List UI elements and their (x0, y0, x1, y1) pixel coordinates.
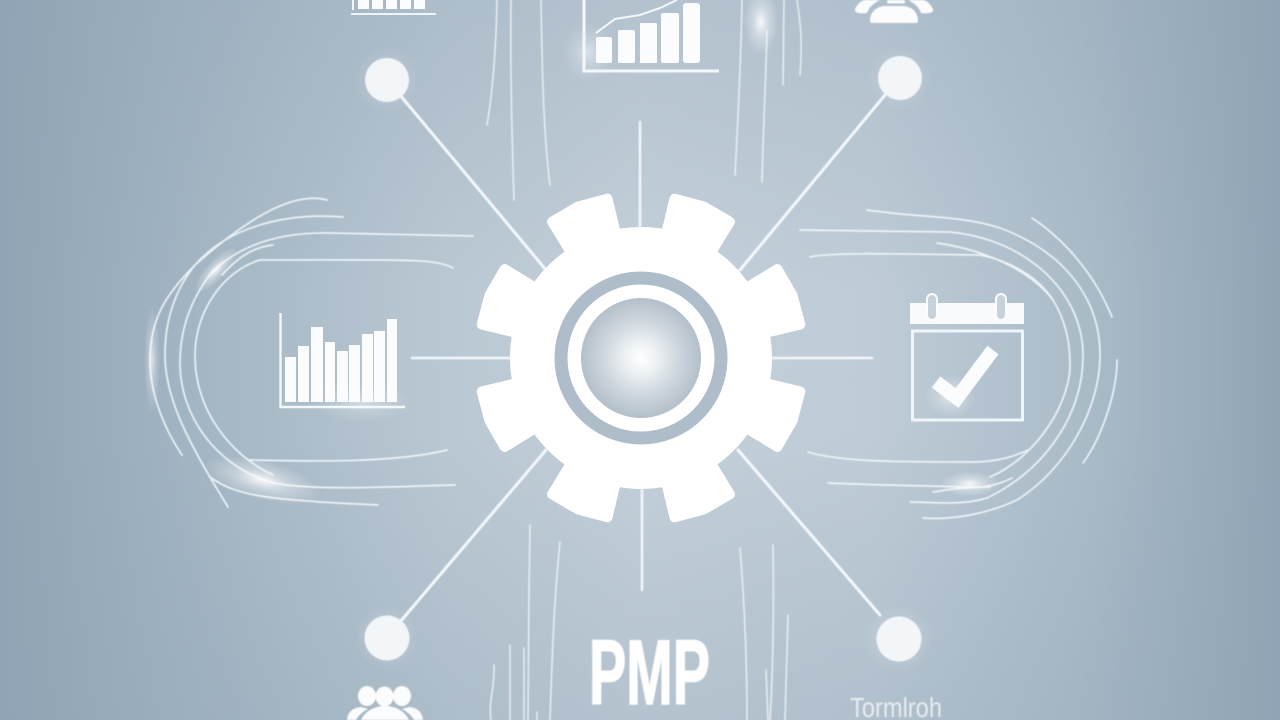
icon: top left chart fragment (351, 0, 436, 14)
gear hub (581, 298, 701, 418)
central gear (478, 195, 804, 521)
icon: left bar chart (280, 313, 412, 422)
icon: top right people (855, 0, 933, 23)
node: top left (355, 48, 419, 112)
left curved streaks (150, 198, 473, 507)
node: bottom right (865, 605, 933, 673)
node: bottom left (355, 606, 419, 670)
node: top right (868, 46, 932, 110)
right streak highlight (940, 471, 1000, 497)
calendar rings (927, 294, 1006, 320)
right curved streaks (800, 210, 1117, 518)
top light flare (744, 0, 778, 56)
bottom circuit lines (490, 525, 788, 720)
check mark (924, 374, 976, 418)
icon: calendar with check mark (910, 294, 1024, 420)
top circuit lines (487, 0, 801, 200)
left streak highlights (144, 241, 325, 514)
gear body (478, 195, 804, 521)
gear ring (561, 278, 721, 438)
connector lines (400, 95, 885, 622)
icon: top growth chart (562, 0, 719, 82)
icon: bottom left people (347, 686, 423, 720)
